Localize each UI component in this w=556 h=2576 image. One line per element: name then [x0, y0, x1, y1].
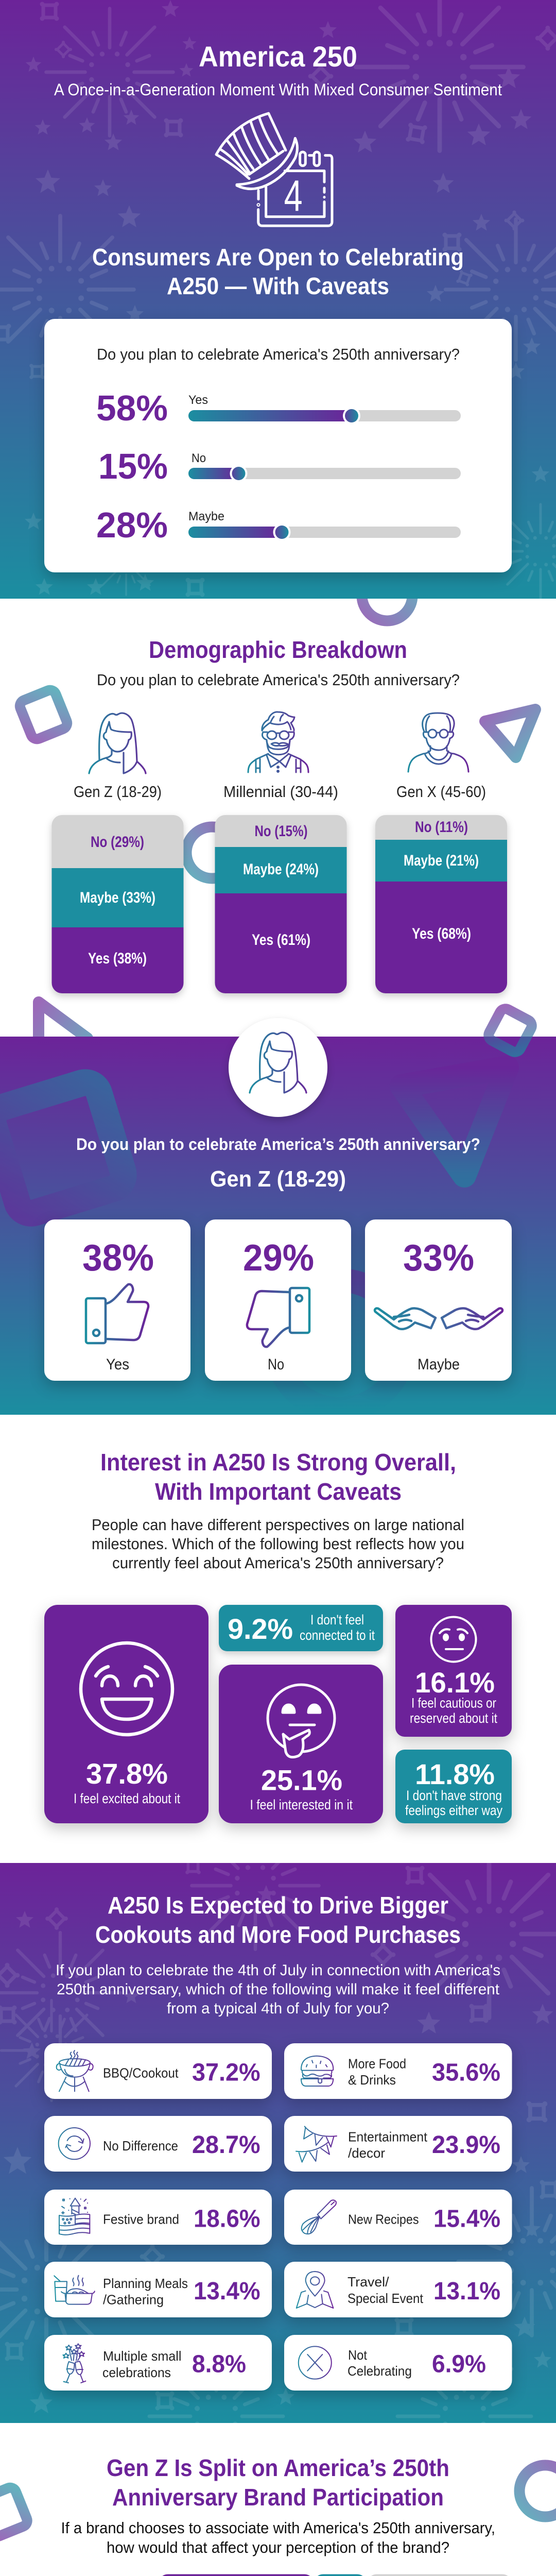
- panel: demographic breakdown: [14, 599, 541, 1037]
- bar: maybe 28%: 28%: [96, 505, 168, 545]
- question paragraph: currently feel about America's 250th anniversary?: [112, 1554, 444, 1572]
- label: gen z: Gen Z (18-29): [74, 783, 162, 801]
- card: entertainment decor: 23.9%: [432, 2131, 500, 2159]
- card: yes 38%: 38%: [82, 1238, 154, 1279]
- card: planning meals: 13.4%: [194, 2278, 260, 2305]
- card: entertainment decor: [284, 2116, 512, 2172]
- bar: yes 58%: 58%: [96, 388, 168, 428]
- card: travel special event: 13.1%: [433, 2278, 500, 2305]
- icon: uncle sam hat on calendar: 4: [284, 172, 303, 221]
- card: festive brand: [44, 2190, 272, 2245]
- card: no strong feelings 11.8%: I don't have strong: [406, 1788, 502, 1803]
- card: planning meals: Planning Meals: [103, 2276, 188, 2291]
- question paragraph: milestones. Which of the following best reflects how you: [92, 1535, 464, 1553]
- heading: gen z split: Gen Z Is Split on America’s 250th: [107, 2454, 449, 2481]
- bar: yes 58%: [96, 388, 461, 428]
- question text: Do you plan to celebrate America's 250th anniversary?: [97, 671, 460, 689]
- question heading: Do you plan to celebrate America’s 250th anniversary?: [76, 1135, 480, 1154]
- panel: interest section: [44, 1449, 512, 1823]
- icon: gen z person: [89, 713, 146, 773]
- chart: millennial stacked column: No (15%): [254, 823, 308, 840]
- heading: a250 cookouts: Cookouts and More Food Purchases: [95, 1921, 461, 1948]
- chart: gen z stacked column: Yes (38%): [88, 950, 147, 967]
- card: excited 37.8%: 37.8%: [86, 1757, 168, 1790]
- chart: gen z stacked column: Maybe (33%): [80, 889, 155, 906]
- card: yes 38%: [44, 1219, 190, 1381]
- card: new recipes: 15.4%: [433, 2205, 500, 2233]
- heading: gen z split: Anniversary Brand Participation: [112, 2484, 444, 2511]
- question paragraph: People can have different perspectives on large national: [92, 1516, 464, 1534]
- chart: gen x stacked column: No (11%): [415, 819, 468, 836]
- panel: plan to celebrate card: [44, 319, 512, 572]
- card: excited 37.8%: I feel excited about it: [74, 1791, 180, 1806]
- title: America 250: [199, 40, 357, 73]
- chart: millennial stacked column: Maybe (24%): [243, 861, 319, 878]
- card: cautious 16.1%: reserved about it: [410, 1710, 497, 1726]
- question text: Do you plan to celebrate America's 250th anniversary?: [97, 345, 460, 363]
- card: new recipes: New Recipes: [348, 2211, 419, 2227]
- avatar circle: [229, 1018, 327, 1117]
- card: no strong feelings 11.8%: 11.8%: [415, 1758, 495, 1790]
- chart: gen pop stacked bar: [45, 2574, 512, 2576]
- card: no strong feelings 11.8%: feelings either way: [405, 1803, 502, 1818]
- heading: gen z: Gen Z (18-29): [210, 1166, 346, 1192]
- card: interested 25.1%: I feel interested in it: [250, 1797, 353, 1812]
- card: new recipes: [284, 2190, 512, 2245]
- card: maybe 33%: Maybe: [418, 1356, 460, 1373]
- bar: maybe 28%: [96, 505, 461, 545]
- card: planning meals: /Gathering: [103, 2292, 164, 2307]
- icon: uncle sam hat on calendar: [216, 113, 332, 226]
- panel: brand participation: [0, 2454, 556, 2576]
- card: no difference: 28.7%: [192, 2131, 260, 2159]
- question paragraph: from a typical 4th of July for you?: [167, 2000, 389, 2017]
- card: maybe 33%: [365, 1219, 512, 1381]
- chart: gen x stacked column: Maybe (21%): [404, 852, 479, 869]
- subtitle: A Once-in-a-Generation Moment With Mixed Consumer Sentiment: [54, 80, 502, 99]
- card: not connected 9.2%: 9.2%: [228, 1613, 293, 1645]
- card: cautious 16.1%: 16.1%: [415, 1666, 495, 1699]
- card: travel special event: Special Event: [348, 2291, 424, 2306]
- heading: consumers are open: Consumers Are Open to Celebrating: [92, 244, 464, 270]
- chart: gen z stacked column: [51, 815, 184, 993]
- card: no difference: [44, 2116, 272, 2172]
- heading: interest: With Important Caveats: [155, 1478, 402, 1505]
- heading: gen z split: [107, 2454, 449, 2511]
- card: bbq cookout: [44, 2043, 272, 2099]
- card: no difference: No Difference: [103, 2138, 178, 2154]
- card: cautious 16.1%: I feel cautious or: [411, 1695, 496, 1710]
- heading: interest: [100, 1449, 456, 1505]
- card: more food and drinks: [284, 2043, 512, 2099]
- question paragraph: If you plan to celebrate the 4th of July in connection with America's: [56, 1962, 500, 1979]
- chart: gen x stacked column: Yes (68%): [412, 925, 471, 942]
- chart: millennial stacked column: [215, 815, 347, 993]
- question paragraph: how would that affect your perception of the brand?: [107, 2538, 449, 2556]
- panel: gen z section: [0, 1007, 556, 1415]
- question paragraph: [56, 1962, 500, 2017]
- icon: millennial person: [248, 712, 308, 772]
- question paragraph: [61, 2519, 495, 2556]
- card: bbq cookout: BBQ/Cookout: [103, 2065, 179, 2081]
- heading: consumers are open: A250 — With Caveats: [167, 273, 389, 299]
- card: multiple small celebrations: [44, 2335, 272, 2391]
- heading: a250 cookouts: [95, 1892, 461, 1948]
- card: no 29%: 29%: [243, 1238, 314, 1279]
- card: planning meals: [44, 2262, 272, 2317]
- card: not celebrating: Celebrating: [348, 2363, 412, 2379]
- bar: yes 58%: Yes: [188, 393, 208, 407]
- card: festive brand: 18.6%: [194, 2205, 260, 2233]
- bar: no 15%: [98, 446, 461, 486]
- card: interested 25.1%: [219, 1665, 383, 1823]
- card: more food and drinks: & Drinks: [348, 2072, 396, 2088]
- card: not celebrating: 6.9%: [432, 2350, 486, 2378]
- question paragraph: [92, 1516, 464, 1572]
- card: cautious 16.1%: [395, 1605, 512, 1737]
- card: excited 37.8%: [44, 1605, 208, 1823]
- card: not celebrating: Not: [348, 2347, 368, 2363]
- card: multiple small celebrations: Multiple small: [103, 2348, 181, 2364]
- heading: interest: Interest in A250 Is Strong Overall,: [100, 1449, 456, 1476]
- card: no 29%: [205, 1219, 351, 1381]
- bar: no 15%: 15%: [98, 446, 168, 486]
- chart: gen z stacked column: No (29%): [91, 834, 144, 851]
- panel: hero section: [0, 0, 556, 599]
- card: travel special event: Travel/: [348, 2274, 389, 2290]
- card: entertainment decor: /decor: [348, 2145, 385, 2161]
- card: entertainment decor: Entertainment: [348, 2129, 428, 2144]
- panel: cookouts section: [0, 1863, 556, 2423]
- label: millennial: Millennial (30-44): [223, 783, 338, 801]
- bar: no 15%: No: [192, 451, 206, 465]
- question paragraph: If a brand chooses to associate with America's 250th anniversary,: [61, 2519, 495, 2537]
- card: travel special event: [284, 2262, 512, 2317]
- heading: demographic breakdown: Demographic Breakdown: [149, 636, 407, 663]
- card: no 29%: No: [268, 1356, 284, 1373]
- label: gen x: Gen X (45-60): [396, 783, 486, 801]
- chart: gen x stacked column: [375, 815, 507, 993]
- card: festive brand: Festive brand: [103, 2211, 179, 2227]
- card: yes 38%: Yes: [106, 1356, 129, 1373]
- card: no strong feelings 11.8%: [395, 1750, 512, 1823]
- question paragraph: 250th anniversary, which of the following will make it feel different: [57, 1981, 500, 1998]
- card: interested 25.1%: 25.1%: [261, 1764, 342, 1796]
- card: multiple small celebrations: celebrations: [102, 2365, 171, 2380]
- card: not celebrating: [284, 2335, 512, 2391]
- bar: maybe 28%: Maybe: [188, 510, 224, 523]
- card: more food and drinks: 35.6%: [432, 2059, 500, 2087]
- heading: consumers are open: [92, 244, 464, 299]
- card: bbq cookout: 37.2%: [192, 2059, 260, 2087]
- card: not connected 9.2%: I don't feel: [310, 1612, 364, 1628]
- card: maybe 33%: 33%: [403, 1238, 474, 1279]
- card: multiple small celebrations: 8.8%: [192, 2350, 246, 2378]
- card: more food and drinks: More Food: [348, 2056, 406, 2071]
- card: not connected 9.2%: connected to it: [300, 1628, 375, 1643]
- chart: millennial stacked column: Yes (61%): [252, 931, 310, 948]
- heading: a250 cookouts: A250 Is Expected to Drive Bigger: [108, 1892, 448, 1919]
- card: not connected 9.2%: [219, 1605, 383, 1651]
- icon: gen x person: [408, 713, 468, 772]
